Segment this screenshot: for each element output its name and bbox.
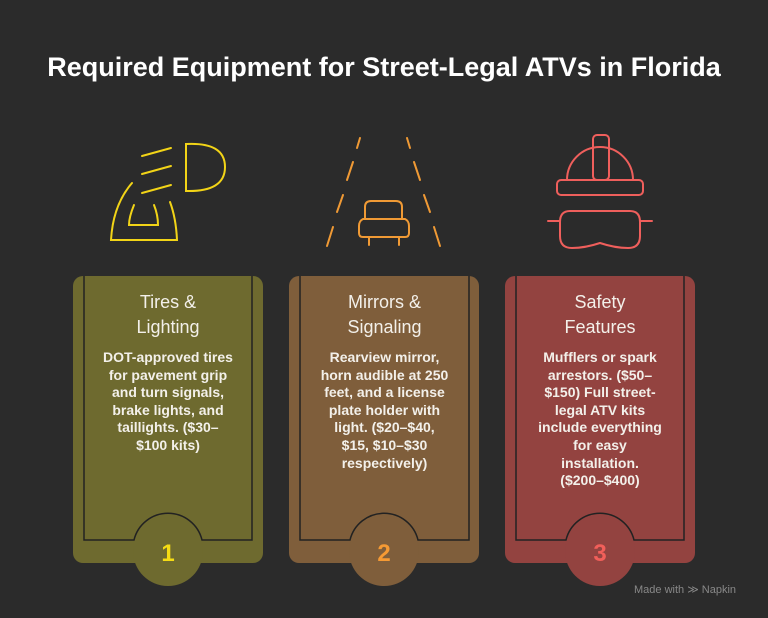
card 2 heading xyxy=(347,292,422,337)
card 2 text: horn audible at 250 xyxy=(321,367,448,383)
card 2 text: plate holder with xyxy=(329,402,440,418)
card 2: 2 xyxy=(377,540,391,567)
card 3 xyxy=(505,276,695,586)
card 1 text: taillights. ($30– xyxy=(117,419,219,435)
card 3 text: arrestors. ($50– xyxy=(548,367,652,383)
card 2 xyxy=(289,276,479,586)
card 2 text: light. ($20–$40, xyxy=(334,419,435,435)
footer credit: Made with ≫ Napkin xyxy=(634,584,736,596)
card 1 xyxy=(73,276,263,586)
card 1 heading: Lighting xyxy=(136,317,200,337)
card 3 text: legal ATV kits xyxy=(555,402,645,418)
card 3 text: ($200–$400) xyxy=(560,472,640,488)
card 3 text: Mufflers or spark xyxy=(543,349,657,365)
card 1 text: DOT-approved tires xyxy=(103,349,233,365)
card 1 text: brake lights, and xyxy=(112,402,224,418)
card 1 heading xyxy=(136,292,200,337)
card 3 text: include everything xyxy=(538,419,662,435)
card 1 text: $100 kits) xyxy=(136,437,200,453)
icon: road with car xyxy=(327,138,440,246)
card 3 text xyxy=(538,349,662,488)
card 3 heading: Safety xyxy=(574,292,626,312)
card 1: 1 xyxy=(161,540,175,567)
card 3: 3 xyxy=(593,540,607,567)
card 2 heading: Signaling xyxy=(347,317,422,337)
card 3 heading xyxy=(564,292,636,337)
card 2 text: feet, and a license xyxy=(324,384,445,400)
card 1 text: for pavement grip xyxy=(109,367,227,383)
card 3 text: installation. xyxy=(561,455,639,471)
card 2 text xyxy=(321,349,448,471)
card 2 heading: Mirrors & xyxy=(348,292,421,312)
title: Required Equipment for Street-Legal ATVs in Florida xyxy=(47,52,721,82)
icon: headlight xyxy=(111,144,225,240)
card 1 heading: Tires & xyxy=(140,292,196,312)
icon: helmet and goggles xyxy=(548,135,652,248)
card 1 text: and turn signals, xyxy=(112,384,224,400)
card 2 text: Rearview mirror, xyxy=(330,349,439,365)
card 3 text: for easy xyxy=(573,437,627,453)
card 2 text: $15, $10–$30 xyxy=(342,437,427,453)
card 1 text xyxy=(103,349,233,453)
card 2 text: respectively) xyxy=(342,455,427,471)
card 3 text: $150) Full street- xyxy=(544,384,656,400)
card 3 heading: Features xyxy=(564,317,636,337)
